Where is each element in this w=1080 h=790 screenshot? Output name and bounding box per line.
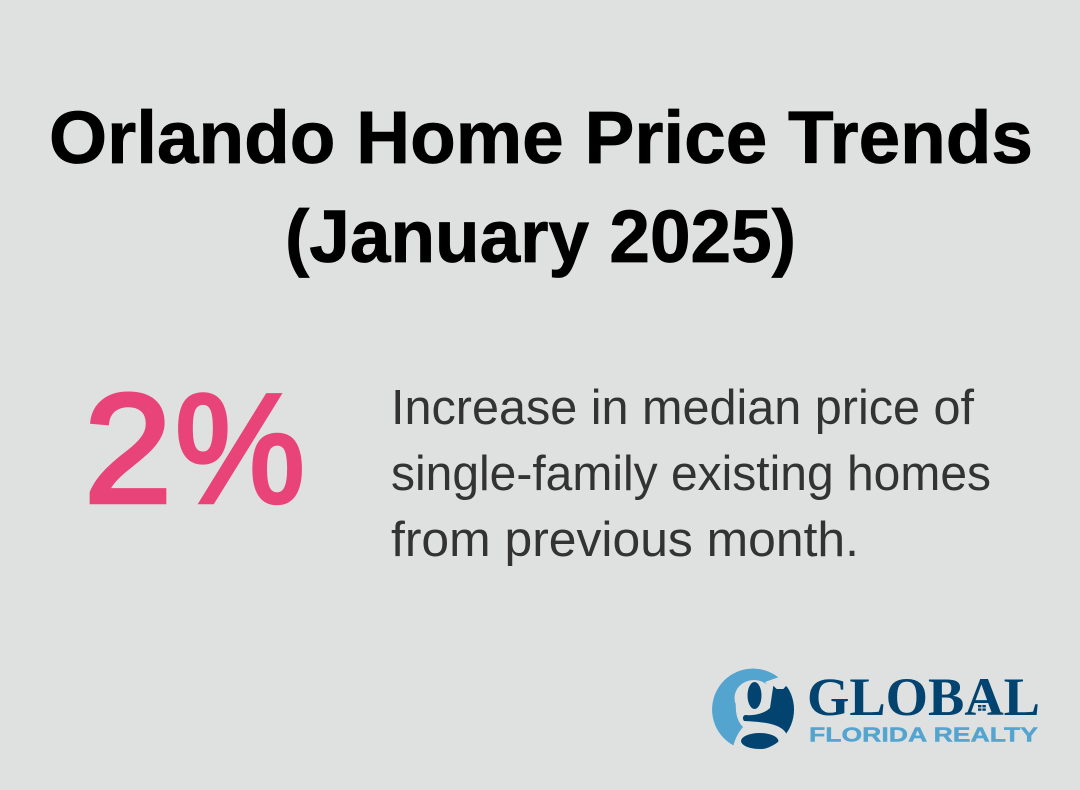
title bbox=[49, 96, 1033, 278]
logo: Global Florida Realty bbox=[712, 667, 1040, 752]
statistic: 2%: 2 bbox=[84, 362, 172, 535]
statistic: 2% bbox=[84, 362, 305, 535]
wordmark: GLOBAL: GLOBAL bbox=[807, 667, 1040, 727]
icon: g emblem bbox=[712, 668, 800, 752]
statistic: 2%: % bbox=[175, 362, 305, 535]
icon: house window bbox=[976, 703, 988, 713]
description text: single-family existing homes bbox=[391, 447, 991, 501]
description text: from previous month. bbox=[391, 513, 859, 567]
description text: Increase in median price of bbox=[391, 381, 974, 435]
wordmark: FLORIDA REALTY: FLORIDA REALTY bbox=[809, 724, 1038, 746]
title: (January 2025) bbox=[285, 195, 796, 278]
title: Orlando Home Price Trends bbox=[49, 96, 1033, 179]
description text bbox=[391, 381, 991, 567]
